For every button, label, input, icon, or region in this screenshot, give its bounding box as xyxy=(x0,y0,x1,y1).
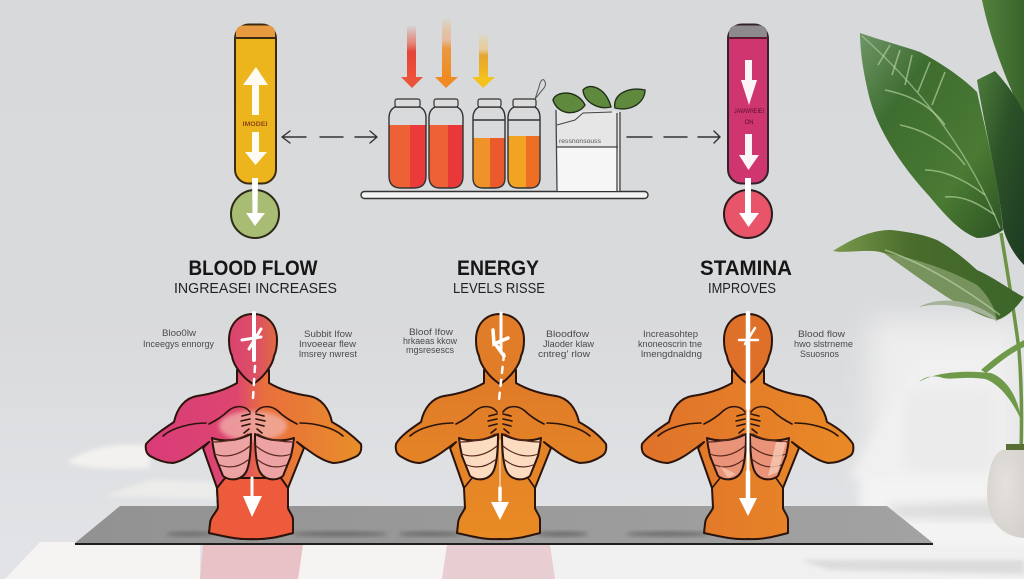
stems xyxy=(1001,233,1022,452)
labels: figure one right xyxy=(299,329,358,359)
tube cap xyxy=(236,26,275,38)
labels: figure three right: Ssuosnos xyxy=(800,349,839,359)
right tube: pink xyxy=(728,24,768,184)
labels: figure three right: Blood flow xyxy=(798,329,846,339)
figure two: orange body xyxy=(396,313,606,539)
floor reflection: pink under second figure xyxy=(442,545,555,579)
labels: figure one left: Bloo0lw xyxy=(162,328,197,338)
labels: figure two right: Bloodfow xyxy=(546,329,590,339)
dashed double arrow: left xyxy=(282,131,377,143)
gradient arrow three xyxy=(472,33,495,88)
shelf xyxy=(361,192,648,198)
labels: figure two left: Bloof Ifow xyxy=(409,327,454,337)
labels: figure two left: hrkaeas kkow xyxy=(403,336,457,346)
top right leaf xyxy=(982,0,1024,117)
flow marks xyxy=(491,313,509,520)
left circle with arrow xyxy=(231,178,279,238)
figure one: pink and orange body xyxy=(146,313,361,539)
heading: stamina: STAMINA xyxy=(700,257,792,280)
arrow up xyxy=(243,67,268,115)
heading: energy: ENERGY xyxy=(457,257,539,280)
shelf of jars xyxy=(361,18,648,198)
flow marks xyxy=(242,313,262,517)
plant xyxy=(833,0,1024,538)
dark leaf xyxy=(977,71,1024,265)
jar 3 xyxy=(473,99,505,188)
gradient arrow one xyxy=(401,25,423,88)
head xyxy=(229,314,277,384)
lower leaf xyxy=(833,230,1024,320)
figure three: orange body xyxy=(642,313,853,539)
arrow down upper xyxy=(741,60,757,105)
flow marks xyxy=(739,313,758,516)
body xyxy=(146,370,361,539)
labels: figure three left: Increasohtep xyxy=(643,329,698,339)
tube label: JAWWREIEI xyxy=(734,109,764,115)
flank joins xyxy=(712,478,783,488)
heading: energy: LEVELS RISSE xyxy=(453,280,545,297)
labels: figure one right: Subbit Ifow xyxy=(304,329,353,339)
hands glow xyxy=(219,411,287,441)
tube label xyxy=(734,109,764,126)
heading: blood flow xyxy=(174,257,337,297)
labels: figure three left: lmengdnaldng xyxy=(641,349,702,359)
plant container: ressnonsouss xyxy=(559,139,601,145)
large leaf xyxy=(860,33,1003,238)
jar 2 xyxy=(429,99,463,188)
dashed arrow: right xyxy=(627,131,720,143)
labels: figure two right xyxy=(538,329,595,359)
jar 1 xyxy=(389,99,426,188)
heading: blood flow: INGREASEI INCREASES xyxy=(174,280,337,297)
yoga mat xyxy=(75,506,933,545)
ribs xyxy=(459,434,541,479)
jar 4 xyxy=(508,80,546,188)
ribs xyxy=(212,434,294,479)
body xyxy=(396,370,606,539)
floor reflection: pink under first figure xyxy=(200,545,303,579)
heading: stamina xyxy=(700,257,792,297)
tube label: ON xyxy=(744,120,754,126)
tube label: IMODEI xyxy=(242,122,268,128)
plant container xyxy=(556,110,620,191)
head xyxy=(476,314,524,384)
sprout leaves xyxy=(553,87,645,113)
hands and creases xyxy=(163,407,343,436)
plant pot xyxy=(987,444,1024,538)
left tube: yellow xyxy=(235,24,276,184)
labels: figure three right xyxy=(794,329,853,359)
tube body xyxy=(728,24,768,184)
right circle with arrow xyxy=(724,178,772,238)
heading: stamina: IMPROVES xyxy=(708,280,776,297)
labels: figure one left xyxy=(143,328,214,349)
labels: figure three left: knoneoscrin tne xyxy=(638,339,702,349)
labels: figure two right: cntreg' rlow xyxy=(538,349,591,359)
hands and creases xyxy=(658,407,838,436)
arrow down lower xyxy=(739,134,759,170)
labels: figure one right: lmsrey nwrest xyxy=(299,349,358,359)
tube body xyxy=(235,24,276,184)
tube cap xyxy=(729,26,767,38)
labels: figure three right: hwo slstrneme xyxy=(794,339,853,349)
head xyxy=(724,314,772,384)
ribs xyxy=(707,434,789,479)
labels: figure two left: mgsresescs xyxy=(406,345,454,355)
labels: figure two left xyxy=(403,327,457,355)
heading: blood flow: BLOOD FLOW xyxy=(188,257,318,280)
small blades xyxy=(919,300,1024,420)
belly xyxy=(209,478,293,539)
labels: figure two right: Jlaoder klaw xyxy=(543,339,595,349)
labels: figure one right: Invoeear flew xyxy=(299,339,357,349)
labels: figure three left xyxy=(638,329,702,359)
gradient arrow two xyxy=(435,18,458,88)
body xyxy=(642,370,853,539)
heading: energy xyxy=(453,257,545,297)
labels: figure one left: Inceegys ennorgy xyxy=(143,339,214,349)
flank joins xyxy=(464,478,535,488)
hands and creases xyxy=(410,407,590,436)
arrow down xyxy=(245,132,267,165)
